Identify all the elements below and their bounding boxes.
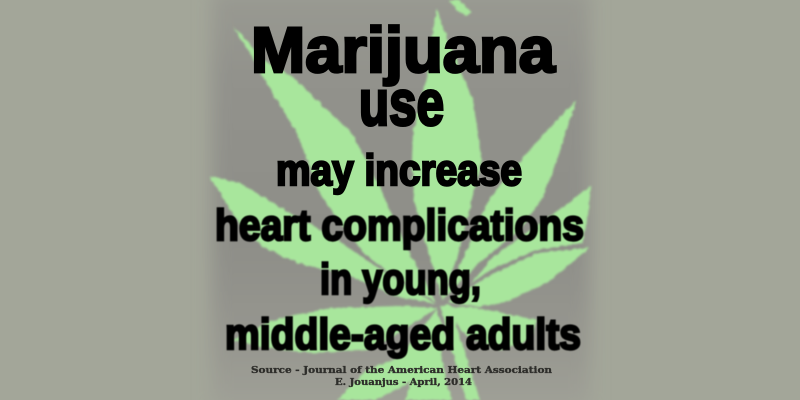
text: source line: Source - Journal of the American Heart Association xyxy=(251,365,552,376)
heading: Marijuana: Marijuana xyxy=(251,14,555,86)
text: in young,: in young, xyxy=(320,255,481,304)
text: heart complications: heart complications xyxy=(215,201,584,250)
leaflet: right xyxy=(448,248,589,307)
leaf tip fragment xyxy=(449,0,471,16)
heading: use: use xyxy=(359,67,444,139)
source credit xyxy=(251,365,552,388)
leaflet: bottom middle xyxy=(405,345,452,400)
headline text xyxy=(215,14,584,359)
text: may increase: may increase xyxy=(276,146,522,195)
leaflet: upper left xyxy=(233,27,436,302)
leaflet: bottom left xyxy=(337,310,448,400)
leaflet: lower left xyxy=(232,306,438,353)
central gray panel xyxy=(212,0,590,400)
text: author and date: E. Jouanjus - April, 2014 xyxy=(335,377,472,388)
stem xyxy=(440,305,480,400)
leaflet: lower right xyxy=(444,306,537,350)
leaflet: far right small xyxy=(470,186,591,285)
leaflet: top xyxy=(412,8,482,300)
text: middle-aged adults: middle-aged adults xyxy=(225,310,581,359)
leaflet: left xyxy=(209,176,436,304)
leaflet: upper right xyxy=(442,101,576,300)
icon: cannabis leaf xyxy=(209,0,591,400)
